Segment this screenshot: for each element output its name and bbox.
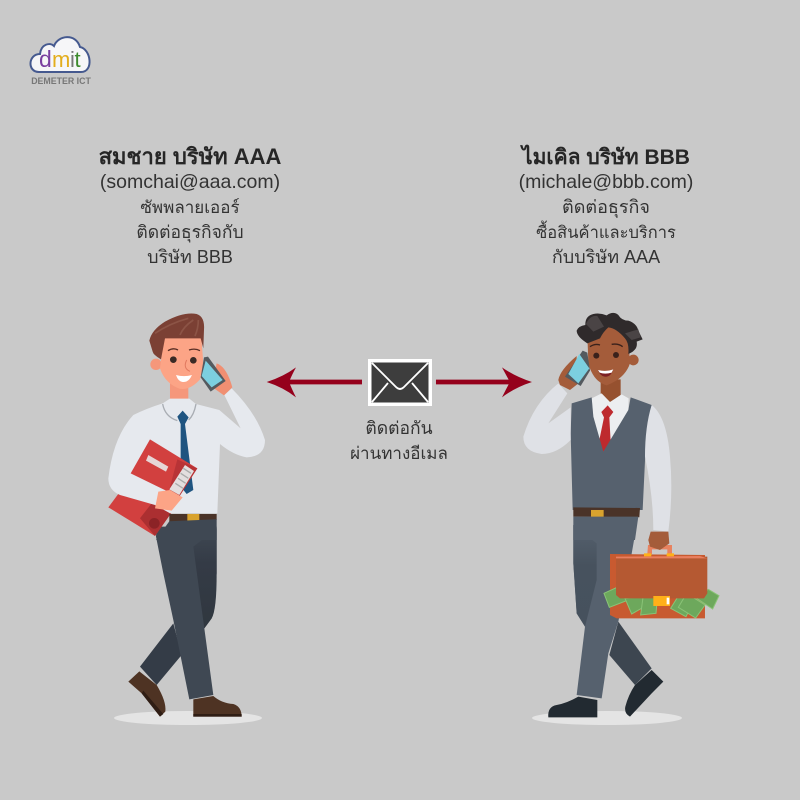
vest	[571, 397, 652, 510]
email exchange diagram	[267, 359, 532, 463]
case flap	[616, 557, 707, 598]
legs and shoes	[128, 527, 242, 717]
left contact relation line 2: บริษัท BBB	[147, 247, 233, 267]
shirt	[108, 388, 265, 513]
hair	[149, 314, 204, 359]
upper body	[523, 313, 671, 540]
ground shadow	[532, 711, 682, 725]
trousers top	[573, 517, 638, 540]
hand holding folder	[155, 490, 183, 511]
legs and shoes	[548, 525, 663, 717]
belt	[169, 514, 217, 522]
briefcase with money	[604, 532, 719, 618]
right contact relation line 1: ซื้อสินค้าและบริการ	[536, 220, 676, 242]
face	[628, 355, 639, 365]
face	[160, 337, 203, 389]
trousers top	[156, 519, 217, 540]
icon: cloud outline	[30, 37, 90, 72]
folder back cover	[108, 492, 173, 536]
heading: right contact name: ไมเคิล บริษัท BBB	[520, 144, 690, 169]
eyes and brows	[170, 356, 177, 363]
upper body	[108, 314, 265, 540]
tie	[177, 411, 193, 494]
caption: contact by email: ติดต่อกัน	[365, 418, 433, 438]
text block: left contact	[99, 144, 282, 267]
right contact role: ติดต่อธุรกิจ	[562, 197, 650, 218]
logo wordmark: d	[39, 46, 52, 72]
phone	[201, 357, 226, 392]
right contact email: (michale@bbb.com)	[519, 171, 693, 193]
raised hand	[212, 363, 232, 395]
logo caption: DEMETER ICT	[31, 76, 91, 86]
banknotes	[604, 586, 719, 618]
heading: left contact name: สมชาย บริษัท AAA	[99, 144, 282, 169]
smile	[598, 369, 613, 377]
eyes and brows	[593, 353, 599, 359]
case body	[610, 554, 705, 618]
left contact relation line 1: ติดต่อธุรกิจกับ	[136, 222, 244, 243]
hair	[577, 313, 643, 354]
logo: dmit Demeter ICT	[30, 37, 91, 86]
shirt front	[592, 393, 629, 453]
neck	[601, 379, 621, 403]
figure: buyer man with briefcase	[523, 313, 719, 725]
logo wordmark: t	[74, 47, 81, 72]
right contact relation line 2: กับบริษัท AAA	[552, 247, 660, 267]
icon: envelope	[368, 359, 432, 406]
arrow: pointing left to supplier	[267, 367, 362, 397]
logo wordmark: m	[52, 47, 70, 72]
phone	[565, 351, 590, 386]
ear	[150, 359, 162, 370]
raised arm sleeve	[523, 383, 571, 454]
caption: contact by email	[350, 418, 448, 463]
neck	[170, 383, 188, 408]
left contact role: ซัพพลายเออร์	[140, 198, 240, 217]
tie	[599, 405, 613, 452]
right sleeve	[645, 405, 671, 532]
raised hand	[558, 356, 581, 390]
logo wordmark	[39, 46, 81, 72]
logo wordmark: i	[70, 47, 75, 72]
text block: right contact	[519, 144, 693, 267]
figure: supplier man with folder	[108, 314, 265, 725]
clasp	[653, 596, 670, 606]
arrow: pointing right to buyer	[436, 367, 532, 397]
belt	[573, 507, 640, 517]
left contact email: (somchai@aaa.com)	[100, 171, 280, 193]
smile	[176, 375, 192, 382]
folder front cover	[131, 439, 197, 497]
handle and hand	[647, 545, 672, 554]
caption: contact by email: ผ่านทางอีเมล	[350, 444, 448, 463]
ground shadow	[114, 711, 262, 725]
